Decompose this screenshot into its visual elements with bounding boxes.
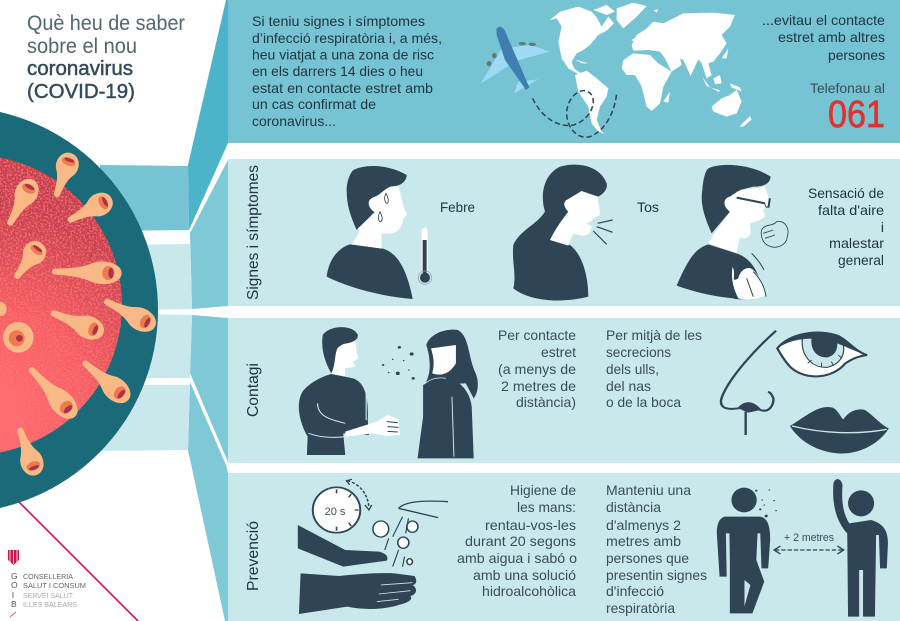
text block: breathlessness: Sensació de (808, 185, 884, 201)
text block: close contact: estret (541, 344, 576, 360)
text block: hand hygiene (457, 482, 577, 599)
text block: hand hygiene: les mans: (517, 499, 576, 515)
callout: phone number: Telefonau al (810, 80, 885, 96)
icon: washing hands with timer (298, 479, 448, 614)
logo: GOIB: CONSELLERIA (23, 572, 73, 581)
bubbles and water (373, 521, 418, 565)
icon: two figures two metres apart (717, 479, 888, 617)
text block: keep distance (606, 482, 707, 616)
text block: secretions (606, 327, 702, 410)
lips (790, 407, 889, 453)
text block: hand hygiene: amb una solució (473, 567, 576, 583)
callout: phone number (810, 80, 885, 136)
text block: intro: coronavirus... (252, 113, 336, 129)
text block: close contact: Per contacte (498, 327, 576, 343)
text block: breathlessness: general (838, 252, 884, 268)
timer (313, 479, 372, 533)
text block: keep distance: d'infecció (606, 583, 664, 599)
icon: person short of breath (677, 165, 788, 299)
text block: keep distance: persones que (606, 550, 689, 566)
icon: person with fever (327, 166, 432, 299)
text block: hand hygiene: rentau-vos-les (485, 517, 576, 533)
title: coronavirus (27, 58, 133, 80)
text block: intro: en els darrers 14 dies o heu (252, 63, 423, 79)
text block: keep distance: presentin signes (606, 567, 707, 583)
text block: avoid contact: persones (828, 47, 885, 63)
title: sobre el nou (27, 35, 137, 58)
nose (721, 331, 776, 435)
icon: world map (550, 3, 752, 134)
title (27, 12, 185, 103)
text block: keep distance: distància (606, 499, 661, 515)
text block: avoid contact (762, 12, 885, 63)
text block: close contact (498, 327, 576, 410)
man (299, 327, 400, 455)
logo: GOIB: B (11, 599, 17, 609)
text block: hand hygiene: hidroalcohòlica (482, 583, 576, 599)
text block: keep distance: Manteniu una (606, 482, 691, 498)
connector strips (100, 0, 228, 621)
text block: hand hygiene: Higiene de (510, 482, 576, 498)
text block: breathlessness (808, 185, 884, 268)
logo: GOIB: SALUT I CONSUM (23, 581, 86, 590)
text block: keep distance: d'almenys 2 (606, 517, 681, 533)
text block: avoid contact: estret amb altres (778, 29, 885, 45)
virus illustration (0, 107, 160, 513)
logo: GOIB: SERVEI SALUT (23, 591, 73, 600)
label: Tos: Tos (637, 199, 659, 215)
logo: GOIB (8, 550, 86, 617)
text block: intro: un cas confirmat de (252, 96, 376, 112)
tap (399, 501, 448, 518)
heading: Prevenció: Prevenció (245, 521, 262, 591)
icon: person coughing (513, 165, 613, 300)
text block: secretions: secrecions (606, 344, 671, 360)
text block: breathlessness: falta d'aire (818, 202, 884, 218)
text block: intro (252, 13, 442, 129)
text block: secretions: dels ulls, (606, 361, 659, 377)
title: Què heu de saber (27, 12, 185, 35)
text block: breathlessness: i (881, 219, 884, 235)
label: + 2 metres: + 2 metres (784, 532, 834, 544)
diagonal red line (0, 483, 138, 621)
icon: airplane with dashed route (481, 27, 617, 137)
eye (777, 332, 867, 376)
text block: secretions: o de la boca (606, 394, 681, 410)
text block: breathlessness: malestar (829, 235, 884, 251)
woman (418, 330, 478, 458)
icon: emblem (8, 550, 19, 565)
text block: intro: heu viatjat a una zona de risc (252, 46, 434, 62)
text block: keep distance: metres amb (606, 533, 681, 549)
logo: GOIB: I (12, 590, 14, 600)
icon: nose, eye and mouth (721, 331, 889, 453)
upper and lower hands (298, 525, 387, 567)
logo: GOIB: O (11, 580, 18, 590)
arrow (775, 548, 842, 552)
text block: keep distance: respiratòria (606, 600, 675, 616)
right figure (833, 479, 888, 617)
text block: hand hygiene: amb aigua i sabó o (457, 550, 577, 566)
text block: intro: estat en contacte estret amb (252, 80, 433, 96)
droplets (382, 346, 415, 380)
label: 20 s: 20 s (325, 506, 346, 518)
text block: secretions: del nas (606, 378, 651, 394)
text block: intro: Si teniu signes i símptomes (252, 13, 425, 29)
logo: GOIB: ILLES BALEARS (23, 600, 77, 609)
icon: two people in close contact (299, 327, 478, 458)
text block: avoid contact: ...evitau el contacte (762, 12, 885, 28)
left figure (717, 488, 770, 613)
text block: secretions: Per mitjà de les (606, 327, 702, 343)
callout: phone number: 061 (828, 94, 885, 136)
droplets (755, 489, 777, 517)
title: (COVID-19) (27, 81, 135, 103)
logo: GOIB: G (11, 571, 18, 581)
panel backgrounds (228, 0, 900, 621)
heading: Signes i símptomes: Signes i símptomes (245, 165, 262, 300)
text block: hand hygiene: durant 20 segons (465, 533, 576, 549)
label: Febre: Febre (440, 199, 475, 215)
text block: close contact: distància) (516, 394, 576, 410)
heading: Contagi: Contagi (245, 363, 262, 417)
text block: intro: d’infecció respiratòria i, a més, (252, 30, 442, 46)
text block: close contact: (a menys de (498, 361, 576, 377)
text block: close contact: 2 metres de (501, 378, 576, 394)
